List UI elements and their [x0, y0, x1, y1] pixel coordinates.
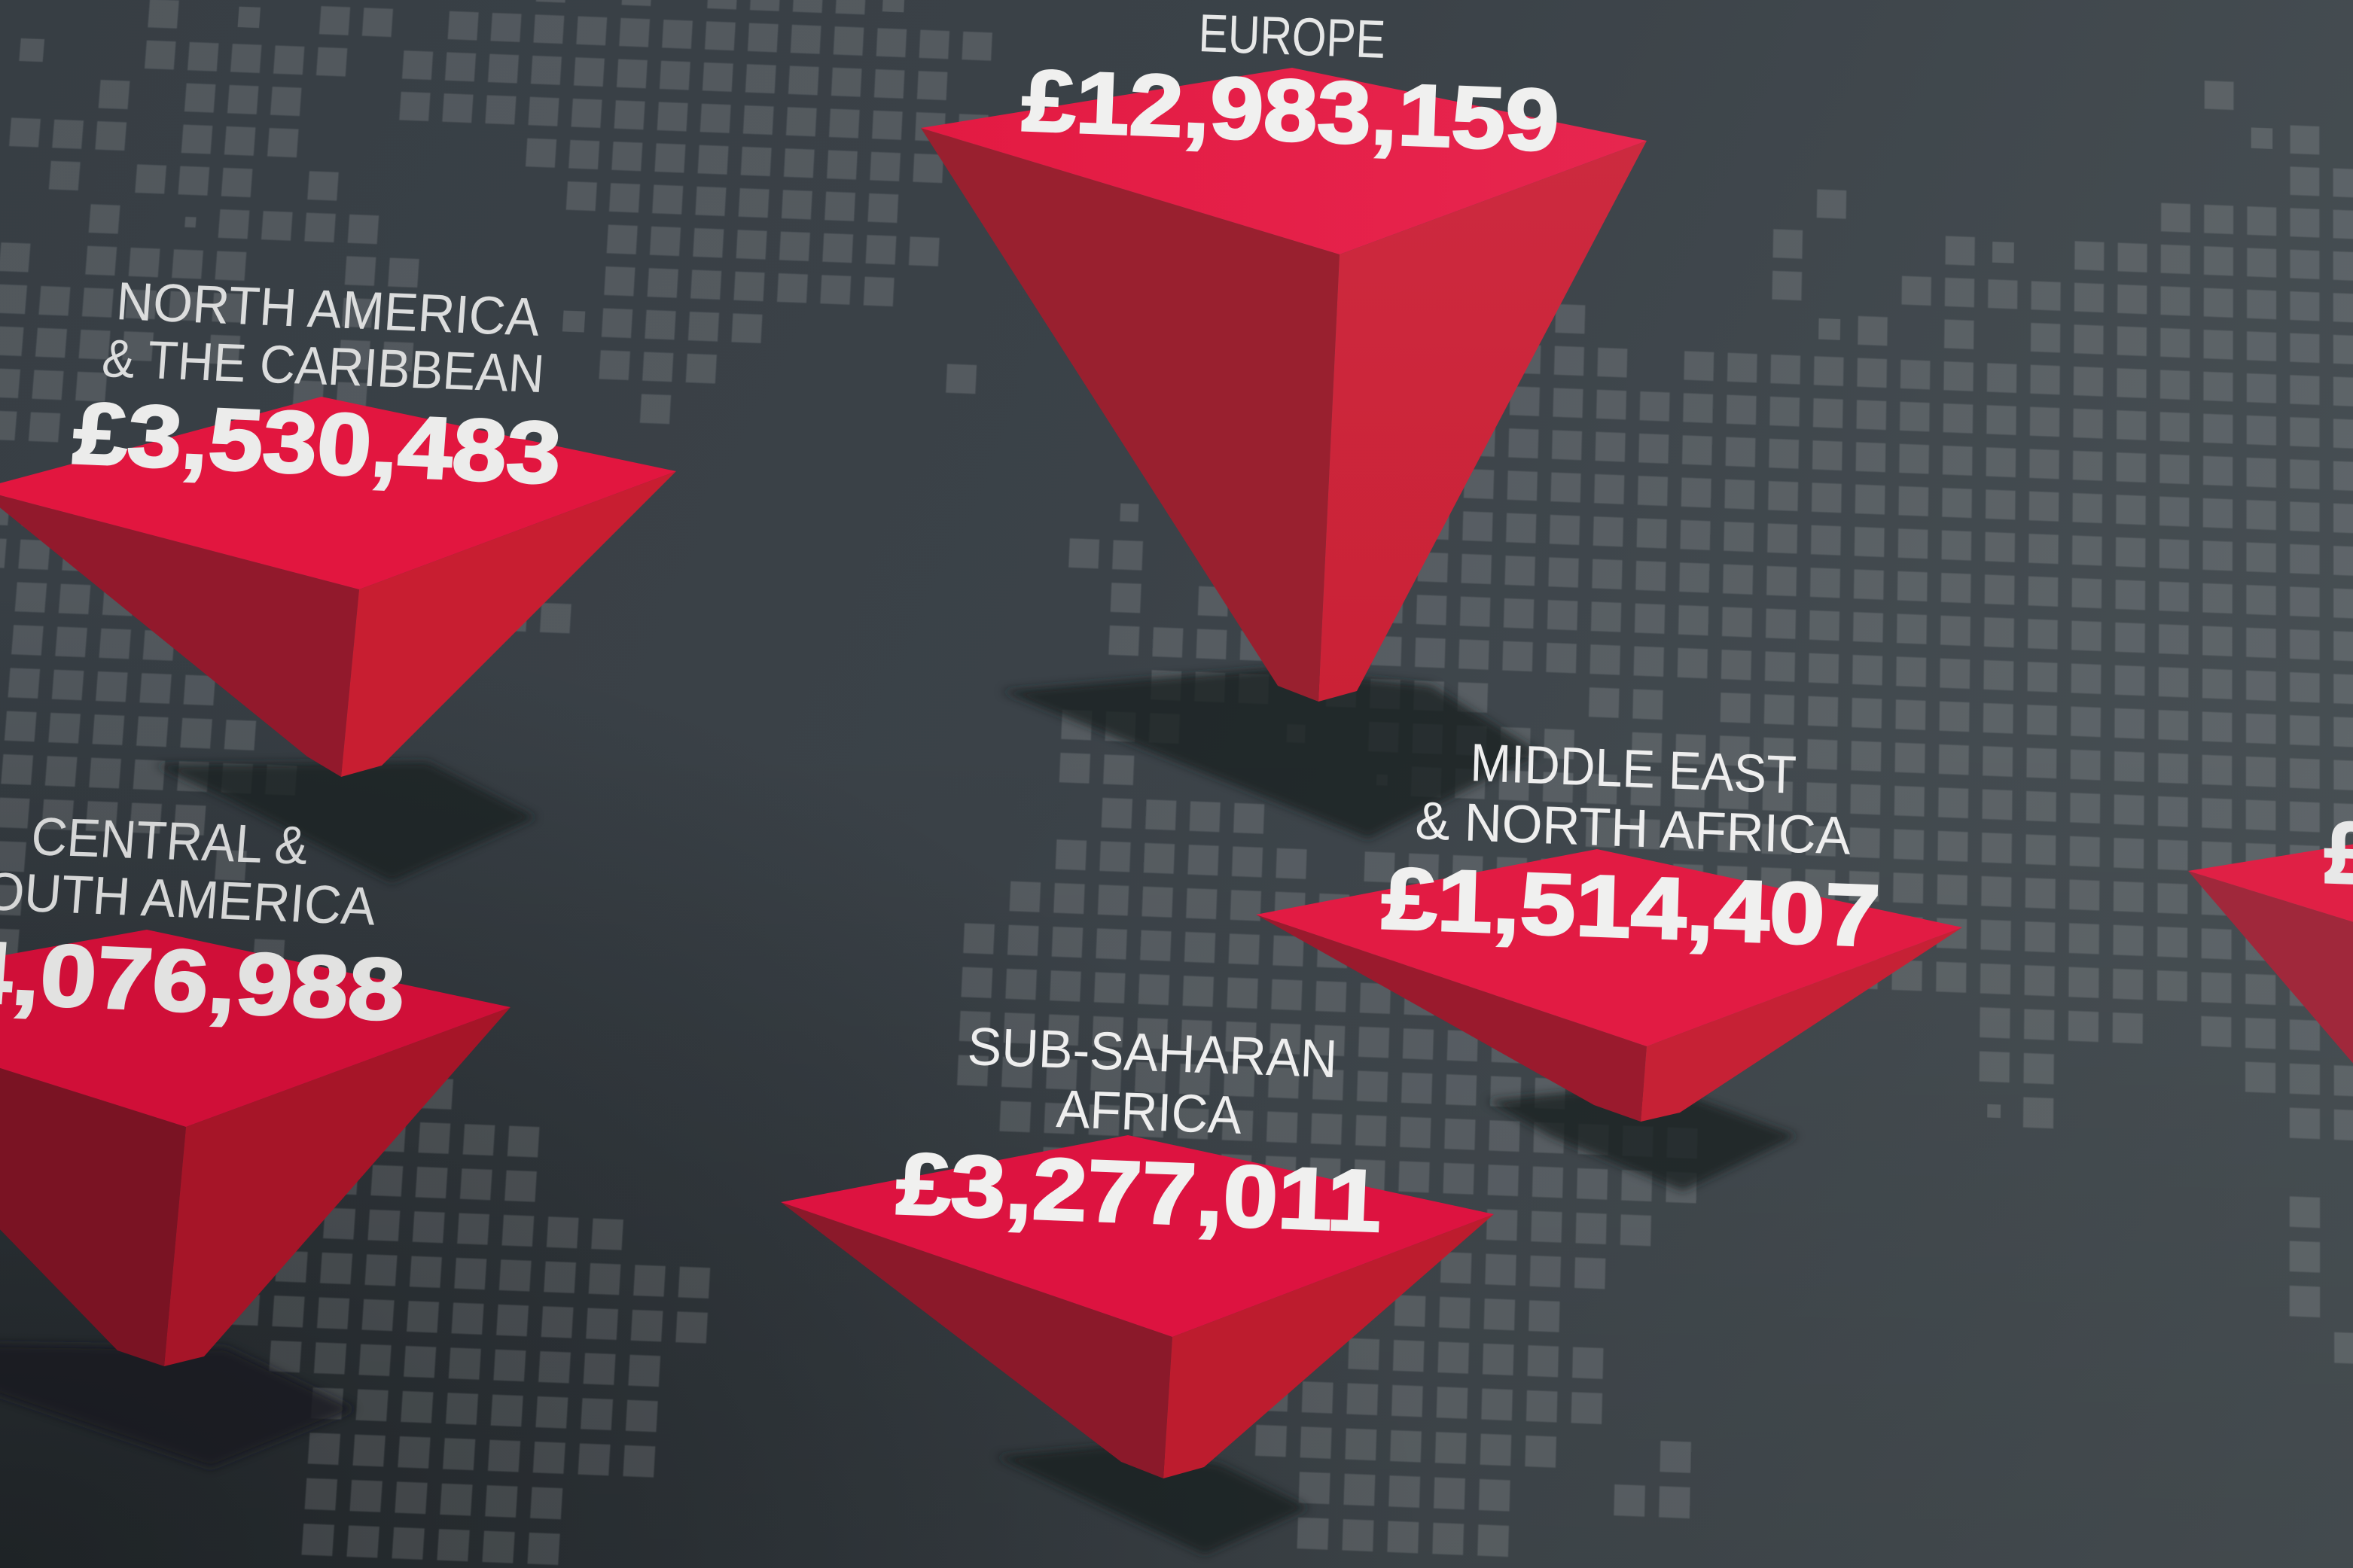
- shadow: Middle East and North Africa: [1487, 1084, 1797, 1191]
- label: Middle East and North Africa: [1415, 733, 1852, 866]
- shadow: Sub-Saharan Africa: [996, 1445, 1309, 1554]
- shadow: Europe: [1001, 668, 1540, 839]
- pyramid: Middle East and North Africa: [1256, 849, 1962, 1122]
- label: Sub-Saharan Africa: [966, 1017, 1339, 1146]
- value: Europe: £12,983,159: [1020, 51, 1561, 169]
- label: Europe: EUROPE: [1197, 4, 1386, 70]
- value: Sub-Saharan Africa: £3,277,011: [895, 1134, 1383, 1250]
- pyramid: North America and the Caribbean: [0, 397, 676, 777]
- label: North America and the Caribbean: NORTH AMERICA: [114, 272, 542, 348]
- label: Sub-Saharan Africa: SUB-SAHARAN: [966, 1017, 1339, 1089]
- value: Middle East and North Africa: £1,514,407: [1380, 849, 1882, 965]
- label: Central and South America: [0, 807, 378, 937]
- label: Sub-Saharan Africa: AFRICA: [1055, 1079, 1243, 1146]
- pyramid: Sub-Saharan Africa: [781, 1135, 1494, 1478]
- label: North America and the Caribbean: [100, 272, 547, 404]
- label: Middle East and North Africa: MIDDLE EAST: [1470, 733, 1797, 805]
- pyramid: cropped region at right edge: [2188, 821, 2353, 1235]
- label: Central and South America: CENTRAL &: [29, 807, 310, 876]
- label: Middle East and North Africa: & NORTH AFRICA: [1415, 791, 1852, 866]
- pyramid: Europe: [921, 68, 1647, 702]
- label: North America and the Caribbean: & THE CARIBBEAN: [100, 329, 547, 404]
- shadow: North America: [154, 762, 536, 882]
- pyramid: Central and South America: [0, 930, 511, 1366]
- shadow: Central and South America: [0, 1344, 355, 1468]
- value: North America and the Caribbean: £3,530,483: [70, 384, 565, 502]
